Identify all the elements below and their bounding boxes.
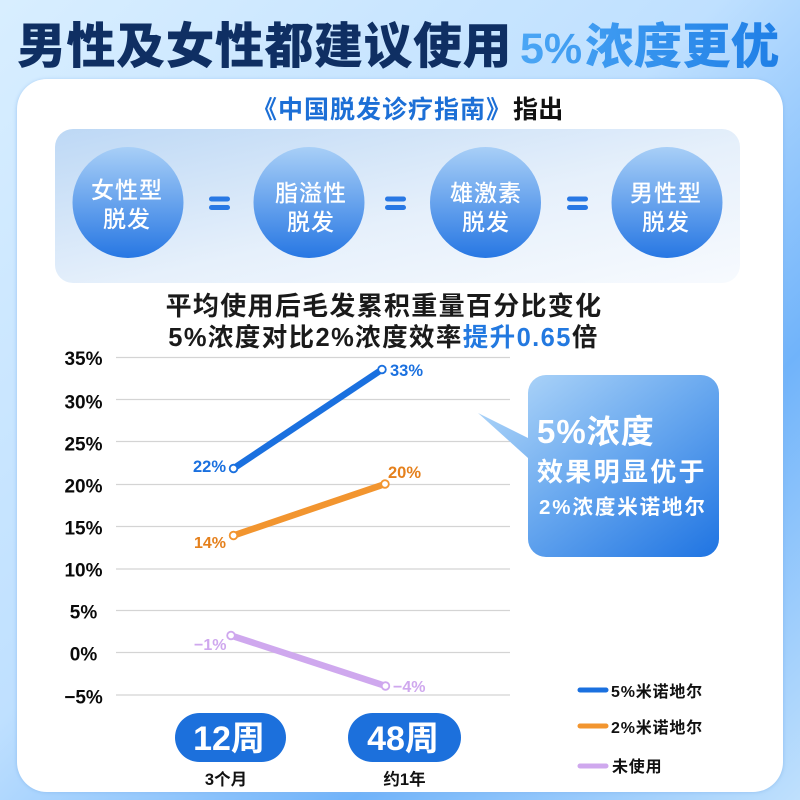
circle: male pattern bbox=[612, 147, 722, 258]
y axis labels: 20% bbox=[64, 476, 103, 498]
series: untreated: −4% bbox=[393, 679, 425, 696]
circle: female pattern bbox=[72, 147, 184, 258]
series: 5% minoxidil: 22% bbox=[193, 458, 226, 476]
legend bbox=[580, 678, 703, 777]
series: untreated: −1% bbox=[194, 637, 226, 654]
title: 男性及女性都建议使用 bbox=[17, 7, 512, 78]
y axis labels bbox=[64, 349, 103, 708]
equals bbox=[209, 196, 230, 210]
circle: androgenic: 雄激素 bbox=[450, 174, 522, 208]
x axis: 48 weeks bbox=[348, 711, 461, 790]
y axis labels: 30% bbox=[64, 392, 103, 414]
x axis: 48 weeks: 约1年 bbox=[383, 766, 426, 790]
circle: male pattern: 男性型 bbox=[630, 174, 702, 208]
x axis: 12 weeks: 3个月 bbox=[205, 766, 247, 790]
legend: 2%: 2%米诺地尔 bbox=[611, 714, 703, 738]
grid lines bbox=[116, 358, 510, 695]
heading: guideline: 指出 bbox=[513, 90, 564, 126]
series: 5% minoxidil bbox=[193, 362, 423, 476]
legend: untreated: 未使用 bbox=[612, 753, 662, 777]
circle: seborrheic: 脂溢性 bbox=[275, 174, 347, 208]
chart heading bbox=[166, 286, 602, 354]
series: 2% minoxidil: 14% bbox=[194, 535, 226, 552]
equals bbox=[385, 196, 406, 210]
chart heading: 平均使用后毛发累积重量百分比变化 bbox=[166, 286, 602, 323]
title: 5%浓度更优 bbox=[520, 7, 779, 77]
y axis labels: 15% bbox=[64, 518, 103, 540]
circle: seborrheic bbox=[254, 147, 364, 258]
x axis: 12 weeks: 12周 bbox=[193, 711, 265, 760]
x axis: 48 weeks: 48周 bbox=[367, 711, 439, 760]
title bbox=[17, 7, 779, 78]
y axis labels: 35% bbox=[64, 349, 103, 370]
circle: female pattern: 脱发 bbox=[103, 200, 151, 234]
panel: hair loss types bbox=[55, 129, 740, 283]
y axis labels: 10% bbox=[64, 560, 103, 582]
x axis: 12 weeks bbox=[175, 711, 286, 790]
series: 2% minoxidil: 20% bbox=[388, 464, 421, 482]
circle: seborrheic: 脱发 bbox=[287, 203, 335, 237]
callout: 2%浓度米诺地尔 bbox=[539, 490, 707, 520]
series: 5% minoxidil: 33% bbox=[390, 362, 423, 380]
y axis labels: 0% bbox=[70, 644, 97, 666]
legend: 5%: 5%米诺地尔 bbox=[611, 678, 703, 702]
chart heading: 5%浓度对比2%浓度效率提升0.65倍 bbox=[168, 317, 599, 354]
series: untreated bbox=[194, 632, 425, 696]
callout: 效果明显优于 bbox=[537, 452, 707, 489]
circle: androgenic bbox=[430, 147, 541, 258]
circle: male pattern: 脱发 bbox=[642, 203, 690, 237]
callout bbox=[478, 375, 719, 557]
heading: guideline: 《中国脱发诊疗指南》 bbox=[252, 90, 512, 126]
y axis labels: 5% bbox=[70, 602, 97, 624]
line chart bbox=[64, 349, 510, 708]
callout: 5%浓度 bbox=[537, 405, 655, 453]
circle: androgenic: 脱发 bbox=[462, 203, 510, 237]
y axis labels: −5% bbox=[64, 688, 103, 708]
circle: female pattern: 女性型 bbox=[91, 171, 163, 205]
series: 2% minoxidil bbox=[194, 464, 421, 552]
y axis labels: 25% bbox=[64, 434, 103, 456]
equals bbox=[567, 196, 588, 210]
